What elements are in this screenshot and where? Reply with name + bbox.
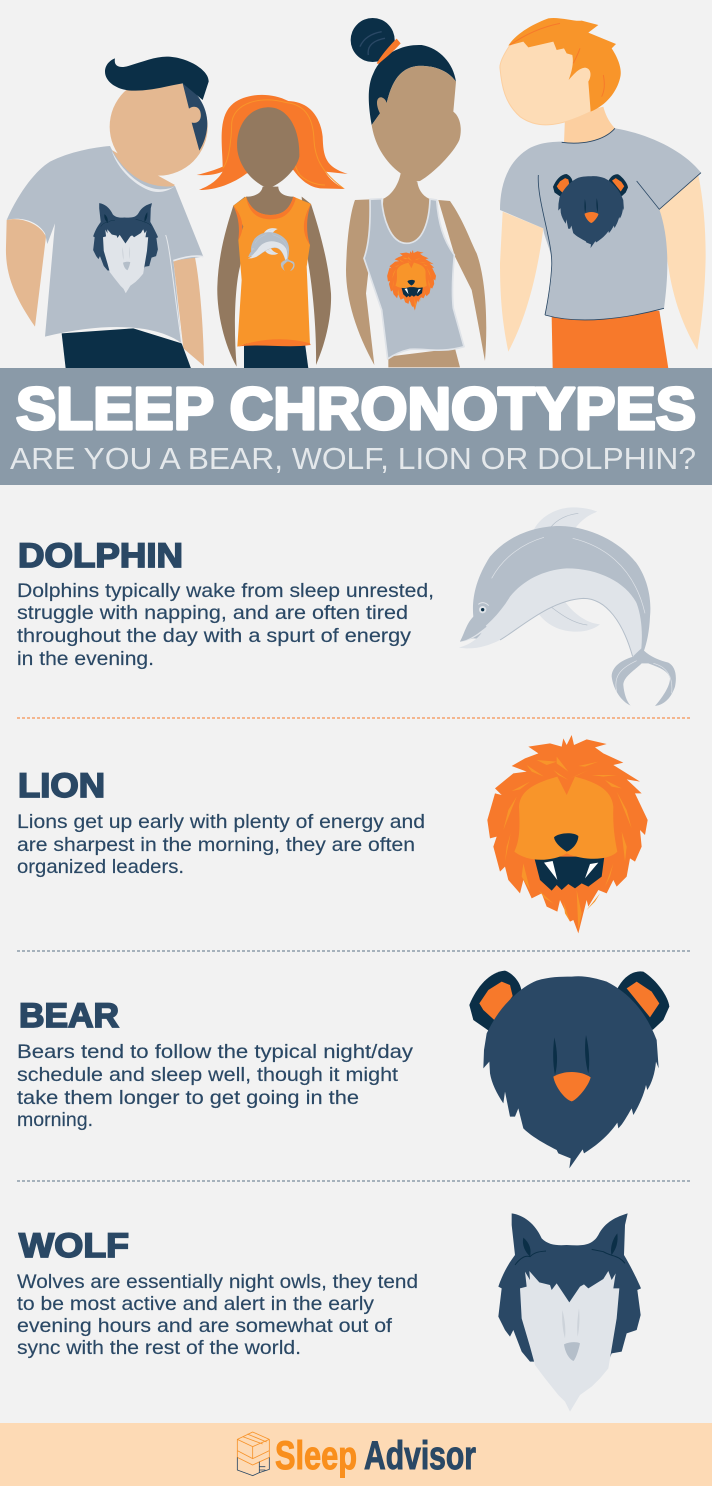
person: man with wolf shirt [6,57,209,368]
divider [17,950,690,952]
icon: wolf [498,1213,641,1412]
text block: lion description: are sharpest in the morning, they are often [17,834,415,856]
logo text: advisor: Advisor [364,1434,476,1478]
person: woman with lion tank top [346,18,486,367]
icon: bear on shirt [553,174,628,248]
divider [17,717,690,719]
text block: dolphin description: in the evening. [17,648,154,670]
heading: sleep chronotypes: SLEEP CHRONOTYPES [16,376,696,442]
heading: wolf: WOLF [19,1227,129,1265]
text block: bear description: morning. [17,1109,93,1131]
heading: lion: LION [18,767,105,805]
icon: dolphin [459,507,676,706]
person: man with bear shirt [500,18,706,368]
illustration: four people wearing chronotype shirts [6,18,706,368]
text block: dolphin description: struggle with napping, and are often tired [17,602,408,624]
panel: bear [17,971,669,1168]
text block: wolf description: sync with the rest of the world. [17,1337,301,1359]
icon: lion on tank top [387,250,436,310]
panel: dolphin [17,507,676,706]
icon: dolphin on tank top [248,228,295,271]
text block: bear description: schedule and sleep well, though it might [17,1064,399,1086]
text block: wolf description [17,1271,418,1359]
heading: bear: BEAR [19,997,119,1035]
text block: lion description: Lions get up early with plenty of energy and [17,811,425,833]
text block: bear description [17,1041,413,1131]
title banner [0,368,712,485]
text block: dolphin description [17,580,434,670]
text block: dolphin description: Dolphins typically wake from sleep unrested, [17,580,434,602]
icon: bear [469,971,669,1168]
footer bar [0,1423,712,1486]
person: girl with dolphin tank top [197,95,348,368]
text block: dolphin description: throughout the day with a spurt of energy [17,625,411,647]
text block: bear description: take them longer to get going in the [17,1087,359,1109]
subtitle: ARE YOU A BEAR, WOLF, LION OR DOLPHIN? [10,441,696,476]
text block: lion description: organized leaders. [17,856,184,878]
text block: lion description [17,811,425,878]
icon: wolf on shirt [93,203,158,293]
logo: sleep advisor [237,1432,357,1478]
text block: wolf description: to be most active and alert in the early [17,1293,374,1315]
panel: lion [17,735,648,933]
text block: bear description: Bears tend to follow the typical night/day [17,1041,413,1063]
divider [17,1180,690,1182]
icon: mattress stack [237,1432,269,1476]
panel: wolf [17,1213,641,1412]
icon: lion [487,735,648,933]
text block: wolf description: Wolves are essentially night owls, they tend [17,1271,418,1293]
heading: dolphin: DOLPHIN [18,537,183,575]
text block: wolf description: evening hours and are somewhat out of [17,1315,393,1337]
logo text: sleep: Sleep [275,1434,357,1478]
